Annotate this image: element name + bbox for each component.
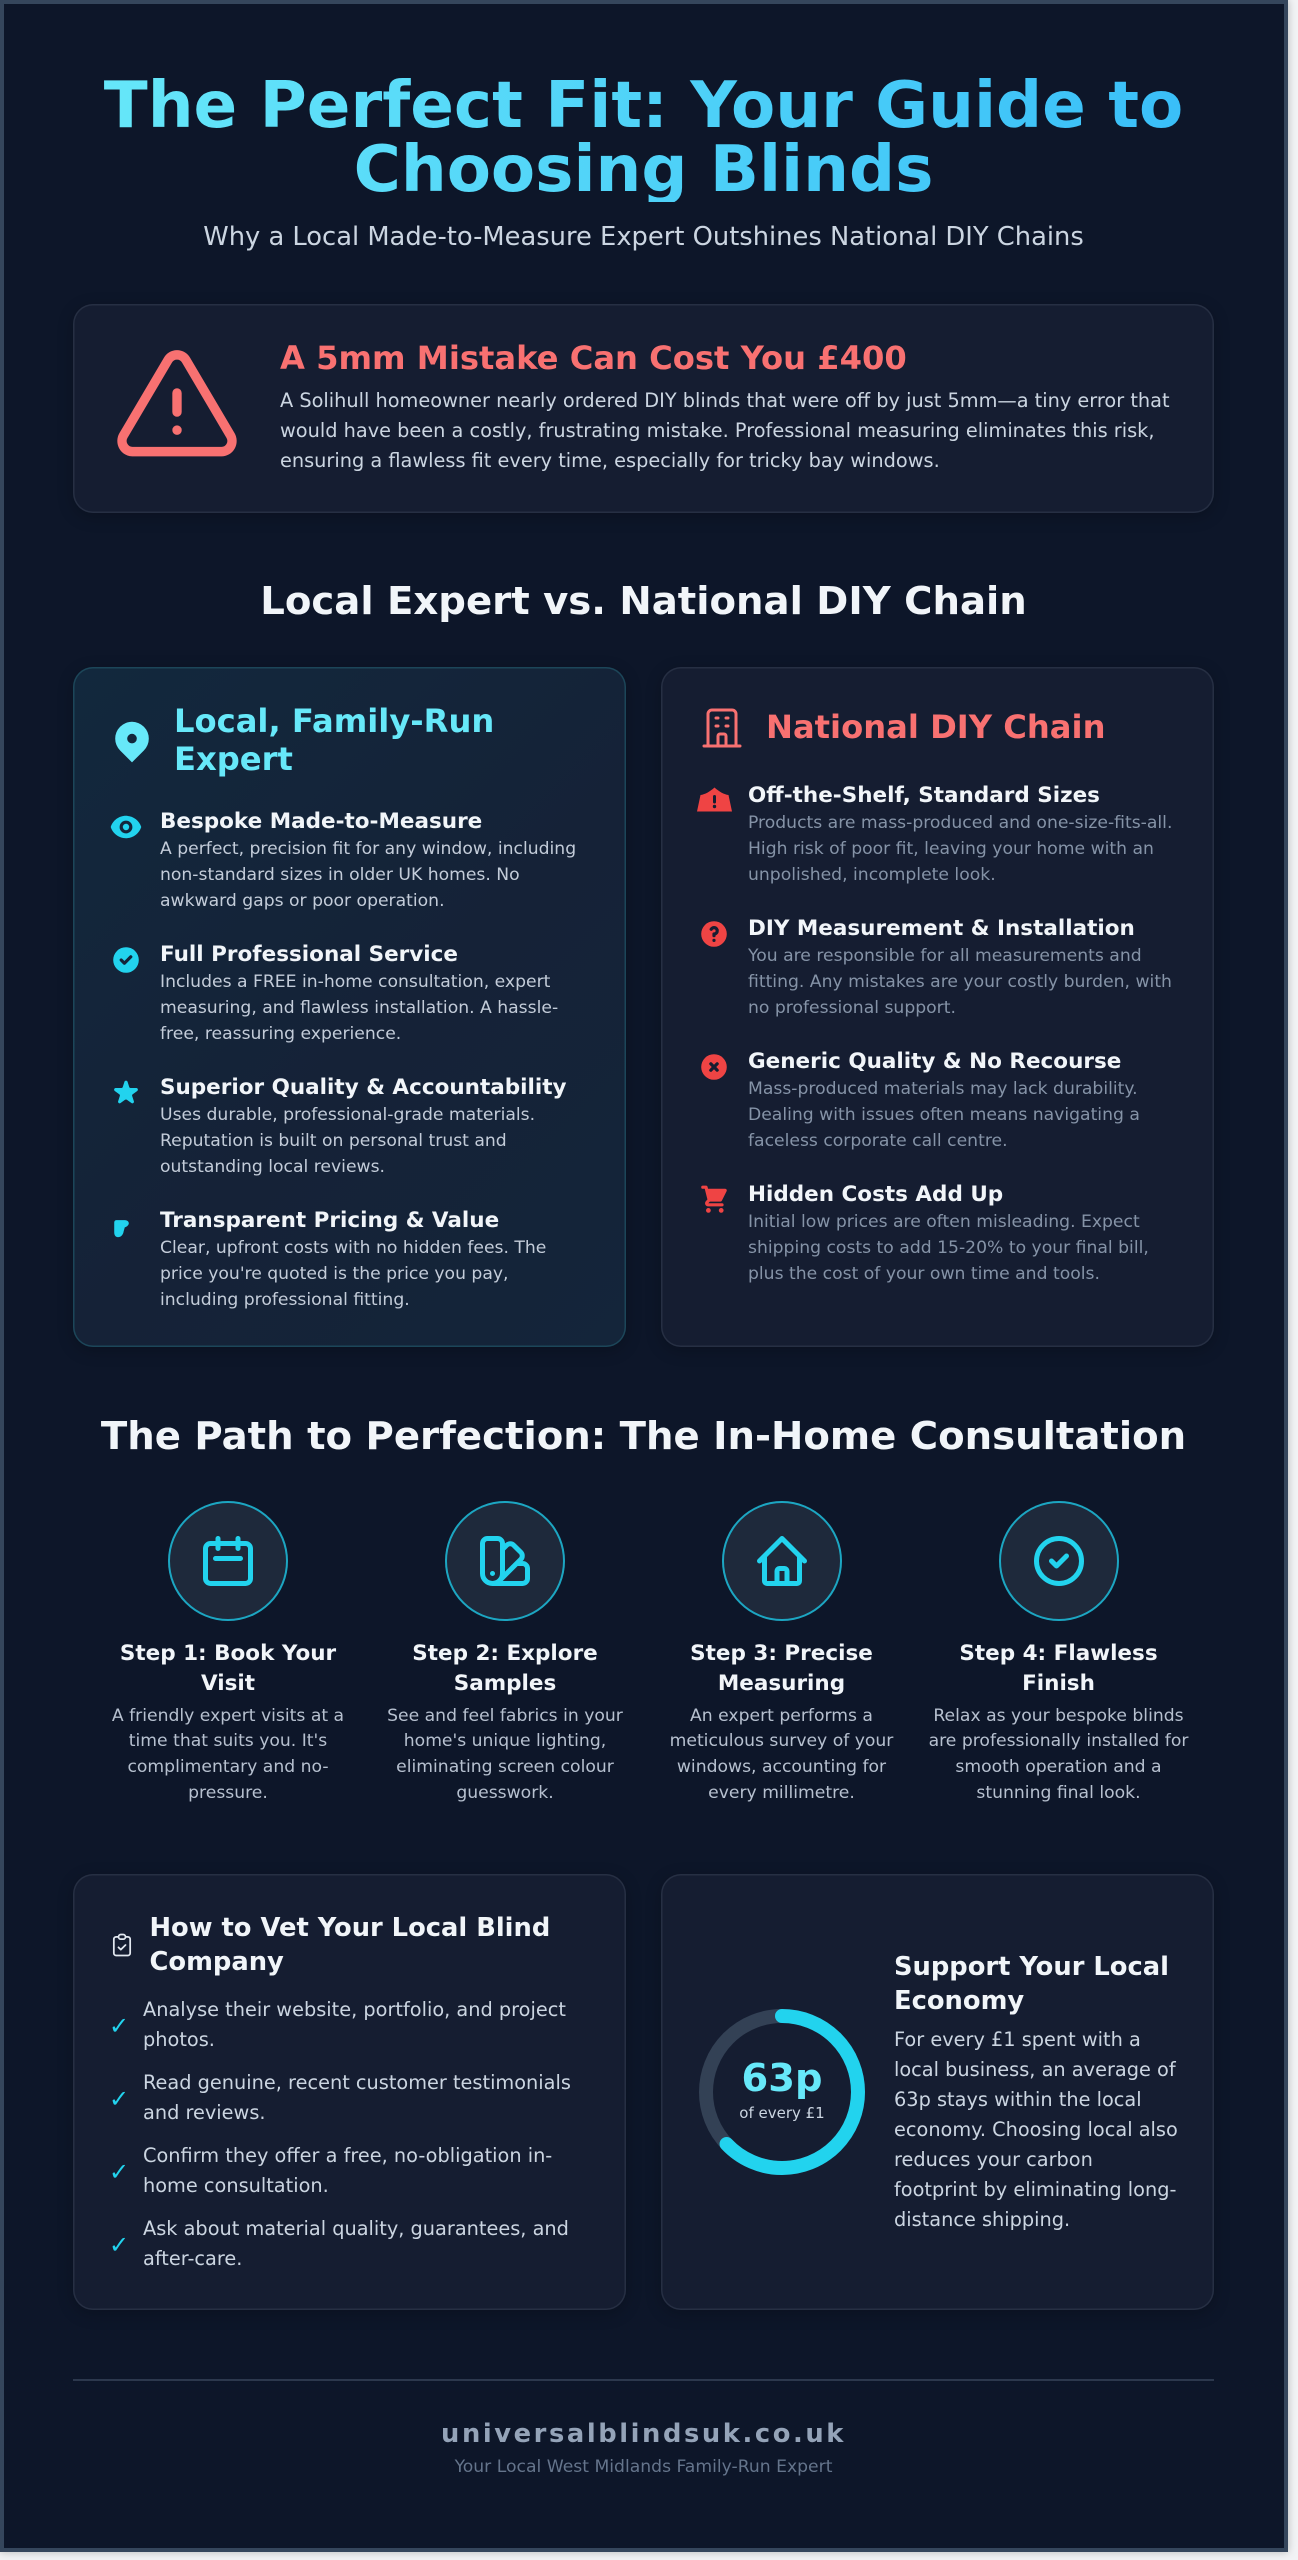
item text: Uses durable, professional-grade materials. bbox=[160, 1105, 535, 1125]
item title: DIY Measurement & Installation bbox=[748, 916, 1135, 941]
item: pricing bbox=[114, 1208, 546, 1310]
panel: how to vet bbox=[73, 1874, 626, 2310]
alert text: A Solihull homeowner nearly ordered DIY blinds that were off by just 5mm—a tiny error that bbox=[280, 389, 1170, 412]
step title: Measuring bbox=[718, 1671, 845, 1696]
item text bbox=[748, 1212, 1149, 1284]
step text bbox=[918, 1704, 1198, 1807]
item text: Mass-produced materials may lack durability. bbox=[748, 1079, 1138, 1099]
subtitle: Why a Local Made-to-Measure Expert Outshines National DIY Chains bbox=[203, 222, 1084, 252]
item text bbox=[160, 972, 558, 1044]
item text: Clear, upfront costs with no hidden fees. The bbox=[160, 1238, 546, 1258]
local heading: Local, Family-Run bbox=[174, 702, 494, 740]
icon: clipboard check bbox=[108, 1931, 136, 1959]
panel: 5mm mistake alert bbox=[73, 304, 1214, 513]
text: photos. bbox=[143, 2028, 215, 2051]
checklist item 1 bbox=[109, 1995, 599, 2055]
step 3 bbox=[670, 1501, 894, 1803]
item text bbox=[748, 1079, 1140, 1151]
item text: A perfect, precision fit for any window, including bbox=[160, 839, 576, 859]
icon: location pin bbox=[115, 722, 149, 762]
item text: You are responsible for all measurements and bbox=[748, 946, 1142, 966]
item text: Includes a FREE in-home consultation, expert bbox=[160, 972, 550, 992]
panel: local economy bbox=[661, 1874, 1214, 2310]
item text: Products are mass-produced and one-size-fits-all. bbox=[748, 813, 1172, 833]
vet heading bbox=[150, 1911, 550, 1979]
item text bbox=[160, 839, 576, 911]
item text: fitting. Any mistakes are your costly burden, with bbox=[748, 972, 1172, 992]
item: quality bbox=[114, 1075, 567, 1177]
text bbox=[143, 1995, 566, 2055]
economy heading: Support Your Local bbox=[894, 1952, 1169, 1982]
step text: meticulous survey of your bbox=[670, 1731, 893, 1751]
step title: Samples bbox=[454, 1671, 556, 1696]
item text bbox=[160, 1105, 535, 1177]
text bbox=[143, 2141, 552, 2201]
donut value: 63p bbox=[742, 2056, 822, 2101]
icon: check in circle bbox=[998, 1501, 1118, 1621]
economy text: footprint by eliminating long- bbox=[894, 2178, 1176, 2201]
item text: Dealing with issues often means navigating a bbox=[748, 1105, 1140, 1125]
step title bbox=[959, 1641, 1158, 1696]
checklist item 2 bbox=[109, 2068, 599, 2128]
step 2 bbox=[387, 1501, 623, 1803]
step text: An expert performs a bbox=[690, 1706, 873, 1726]
title: The Perfect Fit: Your Guide to bbox=[104, 68, 1183, 143]
text: and reviews. bbox=[143, 2101, 266, 2124]
item text: shipping costs to add 15-20% to your final bill, bbox=[748, 1238, 1149, 1258]
alert heading: A 5mm Mistake Can Cost You £400 bbox=[280, 339, 907, 377]
item: generic quality bbox=[701, 1049, 1140, 1151]
donut ring bbox=[699, 2009, 865, 2175]
step text: stunning final look. bbox=[976, 1783, 1141, 1803]
icon: question circle bbox=[701, 921, 727, 947]
item text: unpolished, incomplete look. bbox=[748, 865, 996, 885]
icon: home in circle bbox=[722, 1501, 842, 1621]
step title bbox=[120, 1641, 336, 1696]
item text: Reputation is built on personal trust and bbox=[160, 1131, 507, 1151]
item title: Superior Quality & Accountability bbox=[160, 1075, 567, 1100]
step title: Finish bbox=[1022, 1671, 1095, 1696]
footer website: universalblindsuk.co.uk bbox=[441, 2419, 846, 2449]
step text: guesswork. bbox=[456, 1783, 554, 1803]
item text: no professional support. bbox=[748, 998, 956, 1018]
step text: are professionally installed for bbox=[929, 1731, 1188, 1751]
economy heading bbox=[894, 1950, 1169, 2019]
step title: Step 1: Book Your bbox=[120, 1641, 336, 1666]
item text: outstanding local reviews. bbox=[160, 1157, 385, 1177]
item text: measuring, and flawless installation. A hassle- bbox=[160, 998, 558, 1018]
title: Choosing Blinds bbox=[354, 132, 933, 207]
step text: complimentary and no- bbox=[127, 1757, 329, 1777]
item title: Hidden Costs Add Up bbox=[748, 1182, 1003, 1207]
item text bbox=[748, 946, 1172, 1018]
step title: Step 2: Explore bbox=[412, 1641, 598, 1666]
economy text: distance shipping. bbox=[894, 2208, 1070, 2231]
alert text: ensuring a flawless fit every time, especially for tricky bay windows. bbox=[280, 449, 940, 472]
item title: Generic Quality & No Recourse bbox=[748, 1049, 1121, 1074]
alert text: would have been a costly, frustrating mistake. Professional measuring eliminates this risk, bbox=[280, 419, 1154, 442]
item text: High risk of poor fit, leaving your home with an bbox=[748, 839, 1154, 859]
step title bbox=[412, 1641, 598, 1696]
icon: price tag blob bbox=[114, 1220, 129, 1238]
item: DIY measurement bbox=[701, 916, 1172, 1018]
icon: warning triangle bbox=[117, 350, 237, 456]
step title: Visit bbox=[201, 1671, 255, 1696]
vet heading: How to Vet Your Local Blind bbox=[150, 1913, 550, 1943]
step 4 bbox=[929, 1501, 1188, 1803]
vet heading: Company bbox=[150, 1947, 284, 1977]
item text bbox=[748, 813, 1172, 885]
step 1 bbox=[112, 1501, 344, 1803]
item text: Initial low prices are often misleading. Expect bbox=[748, 1212, 1140, 1232]
economy text: local business, an average of bbox=[894, 2058, 1176, 2081]
step text: eliminating screen colour bbox=[396, 1757, 614, 1777]
icon: warning shield bbox=[697, 788, 732, 812]
check mark: ✓ bbox=[109, 2158, 129, 2186]
step title: Step 3: Precise bbox=[690, 1641, 873, 1666]
text bbox=[143, 2068, 571, 2128]
checklist item 4 bbox=[109, 2214, 599, 2274]
economy text: For every £1 spent with a bbox=[894, 2028, 1141, 2051]
step text: windows, accounting for bbox=[677, 1757, 886, 1777]
economy text bbox=[894, 2025, 1178, 2235]
item text: faceless corporate call centre. bbox=[748, 1131, 1008, 1151]
item text: including professional fitting. bbox=[160, 1290, 410, 1310]
economy heading: Economy bbox=[894, 1986, 1024, 2016]
item text: free, reassuring experience. bbox=[160, 1024, 401, 1044]
item text: plus the cost of your own time and tools. bbox=[748, 1264, 1100, 1284]
donut caption: of every £1 bbox=[739, 2104, 825, 2122]
item title: Off-the-Shelf, Standard Sizes bbox=[748, 783, 1100, 808]
item text: awkward gaps or poor operation. bbox=[160, 891, 445, 911]
text: after-care. bbox=[143, 2247, 242, 2270]
economy text: economy. Choosing local also bbox=[894, 2118, 1178, 2141]
step text bbox=[112, 1706, 344, 1803]
national heading: National DIY Chain bbox=[766, 708, 1105, 746]
step text bbox=[670, 1706, 894, 1803]
step title bbox=[690, 1641, 873, 1696]
item text: non-standard sizes in older UK homes. No bbox=[160, 865, 520, 885]
step text bbox=[387, 1706, 623, 1803]
step text: See and feel fabrics in your bbox=[387, 1706, 623, 1726]
donut chart: 63p of every £1 bbox=[699, 2009, 865, 2175]
icon: shopping cart bbox=[701, 1186, 727, 1213]
heading: comparison: Local Expert vs. National DIY Chain bbox=[260, 579, 1027, 624]
step text: smooth operation and a bbox=[955, 1757, 1162, 1777]
item: full service bbox=[113, 942, 558, 1044]
icon: office building bbox=[702, 708, 742, 748]
step text: pressure. bbox=[188, 1783, 268, 1803]
local heading bbox=[174, 702, 494, 778]
economy text: 63p stays within the local bbox=[894, 2088, 1142, 2111]
icon: calendar in circle bbox=[168, 1501, 288, 1621]
text bbox=[143, 2214, 569, 2274]
item title: Bespoke Made-to-Measure bbox=[160, 809, 482, 834]
step text: every millimetre. bbox=[708, 1783, 855, 1803]
economy text: reduces your carbon bbox=[894, 2148, 1093, 2171]
step title: Step 4: Flawless bbox=[959, 1641, 1158, 1666]
item title: Transparent Pricing & Value bbox=[160, 1208, 499, 1233]
item text: price you're quoted is the price you pay, bbox=[160, 1264, 508, 1284]
heading: consultation path: The Path to Perfection: The In-Home Consultation bbox=[101, 1414, 1186, 1459]
icon: eye bbox=[110, 816, 142, 838]
check mark: ✓ bbox=[109, 2231, 129, 2259]
icon: star bbox=[114, 1080, 138, 1104]
panel: national DIY chain bbox=[661, 667, 1214, 1347]
local heading: Expert bbox=[174, 740, 293, 778]
item title: Full Professional Service bbox=[160, 942, 458, 967]
item: bespoke bbox=[110, 809, 576, 911]
item text bbox=[160, 1238, 546, 1310]
icon: swatches in circle bbox=[445, 1501, 565, 1621]
icon: check circle bbox=[113, 947, 139, 973]
step text: A friendly expert visits at a bbox=[112, 1706, 344, 1726]
text: Confirm they offer a free, no-obligation in- bbox=[143, 2144, 552, 2167]
item: off-the-shelf bbox=[697, 783, 1172, 885]
text: Analyse their website, portfolio, and project bbox=[143, 1998, 566, 2021]
checklist item 3 bbox=[109, 2141, 599, 2201]
check mark: ✓ bbox=[109, 2085, 129, 2113]
step text: time that suits you. It's bbox=[129, 1731, 327, 1751]
step text: Relax as your bespoke blinds bbox=[933, 1706, 1184, 1726]
panel: local expert bbox=[73, 667, 626, 1347]
check mark: ✓ bbox=[109, 2012, 129, 2040]
title bbox=[73, 74, 1214, 202]
alert text bbox=[280, 389, 1170, 472]
text: home consultation. bbox=[143, 2174, 329, 2197]
step text: home's unique lighting, bbox=[404, 1731, 606, 1751]
footer tagline: Your Local West Midlands Family-Run Expert bbox=[455, 2457, 832, 2477]
item: hidden costs bbox=[701, 1182, 1149, 1284]
text: Ask about material quality, guarantees, and bbox=[143, 2217, 569, 2240]
icon: cross circle bbox=[701, 1054, 727, 1080]
text: Read genuine, recent customer testimonials bbox=[143, 2071, 571, 2094]
